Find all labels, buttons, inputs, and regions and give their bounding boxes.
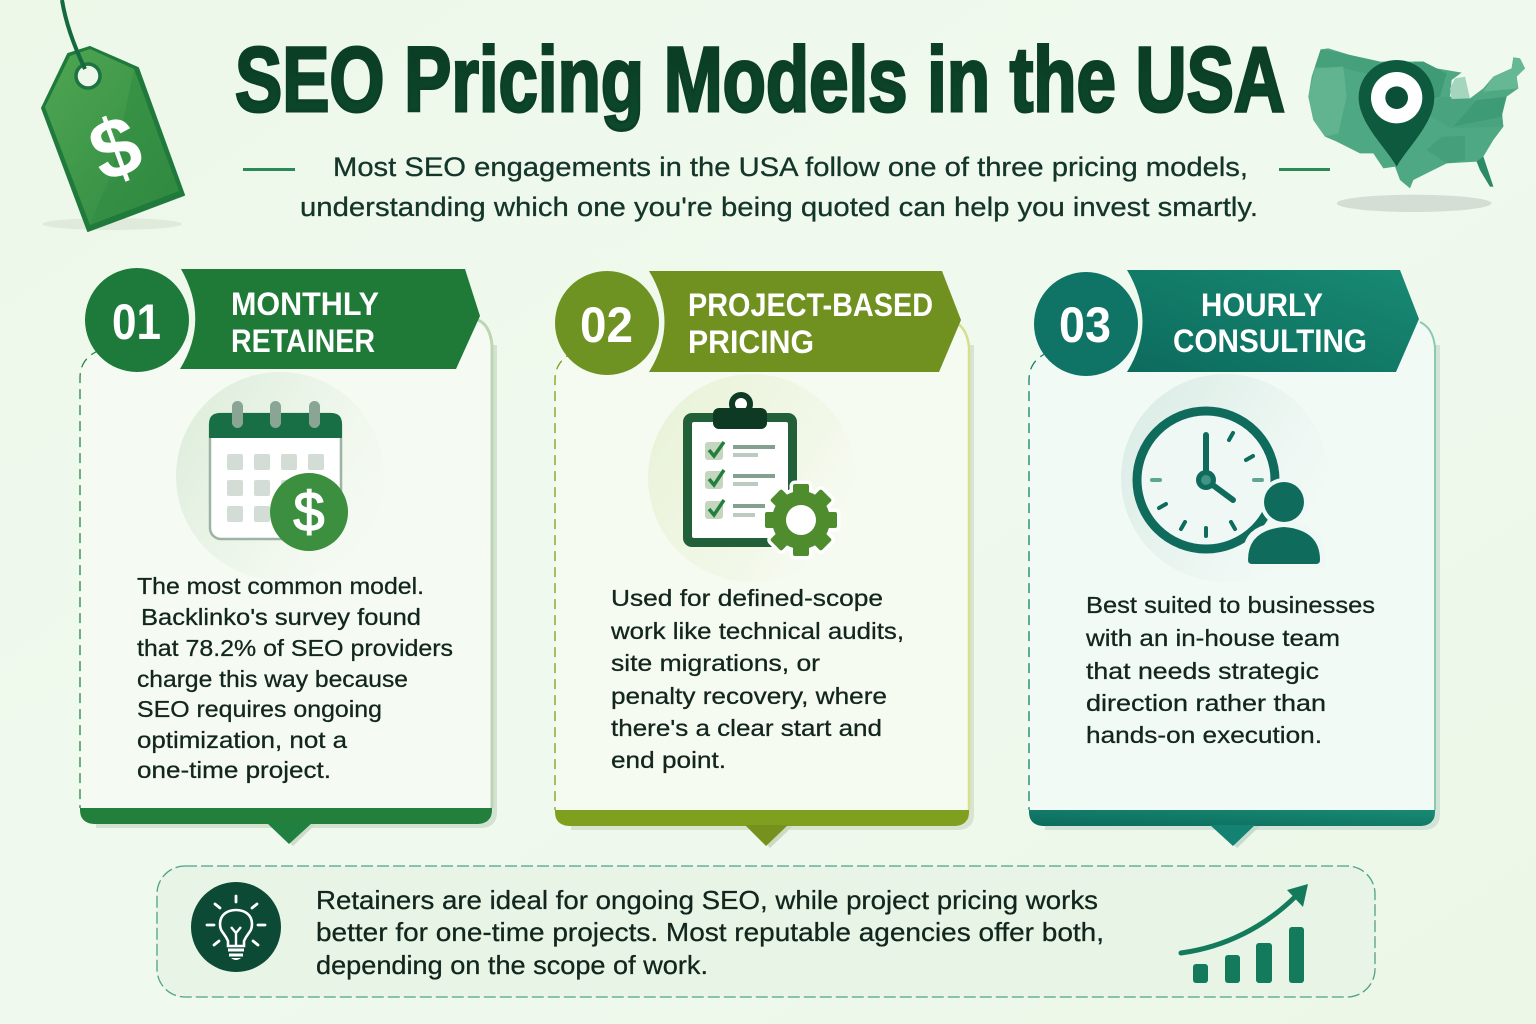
card 3 body text: with an in-house team xyxy=(1085,625,1340,651)
card 1 pointer xyxy=(267,823,316,846)
card 2 body text: end point. xyxy=(611,747,726,773)
icon: price tag xyxy=(42,0,184,231)
subtitle: understanding which one you're being quoted can help you invest smartly. xyxy=(300,192,1258,222)
card 2 heading banner: PRICING xyxy=(688,324,814,360)
icon: USA map with location pin xyxy=(1308,48,1525,212)
card 1 body text xyxy=(137,573,453,783)
card 3 heading banner: CONSULTING xyxy=(1173,323,1367,359)
card 1 heading banner: RETAINER xyxy=(231,323,375,359)
callout text: better for one-time projects. Most reputable agencies offer both, xyxy=(316,917,1104,947)
card 1 body text: The most common model. xyxy=(137,573,424,599)
card 1 body text: Backlinko's survey found xyxy=(141,604,421,630)
callout text xyxy=(316,885,1104,980)
callout text: Retainers are ideal for ongoing SEO, while project pricing works xyxy=(316,885,1098,915)
card 3 bottom band xyxy=(1029,810,1435,826)
card 3 heading banner: HOURLY xyxy=(1201,287,1323,323)
card 1 heading banner xyxy=(180,269,480,369)
card 1 number badge xyxy=(85,268,189,372)
card 1 body text: one-time project. xyxy=(137,757,331,783)
subtitle: Most SEO engagements in the USA follow one of three pricing models, xyxy=(333,152,1248,182)
card 2 body text: there's a clear start and xyxy=(611,715,882,741)
panel: project-based pricing xyxy=(555,271,974,848)
card 3 heading banner xyxy=(1127,270,1419,372)
card 2 pointer xyxy=(745,825,793,848)
card 2 body text: penalty recovery, where xyxy=(611,683,887,709)
card 1 body text: charge this way because xyxy=(137,666,408,692)
card 2 number badge: 02 xyxy=(580,297,633,353)
panel: hourly consulting xyxy=(1029,270,1440,848)
subtitle xyxy=(243,152,1330,222)
icon: growth chart with arrow xyxy=(1181,884,1308,983)
icon: calendar with dollar: $ xyxy=(293,480,325,543)
card 1 number badge: 01 xyxy=(112,294,161,350)
card 2 body text xyxy=(610,585,904,773)
card 1 bottom band xyxy=(80,808,492,824)
card 1 body text: that 78.2% of SEO providers xyxy=(137,635,453,661)
card 2 heading banner: PROJECT-BASED xyxy=(688,287,933,323)
card 1 heading banner: MONTHLY xyxy=(231,286,379,322)
card 3 body text: direction rather than xyxy=(1086,690,1326,716)
panel: monthly retainer xyxy=(80,268,497,846)
icon: clock with person xyxy=(1121,374,1329,582)
card 3 body text xyxy=(1085,592,1375,748)
callout text: depending on the scope of work. xyxy=(316,950,708,980)
card 3 number badge: 03 xyxy=(1059,297,1111,353)
icon: price tag: $ xyxy=(77,96,153,200)
callout: summary note xyxy=(157,866,1375,997)
card 2 body text: work like technical audits, xyxy=(610,618,904,644)
icon: calendar with dollar xyxy=(176,372,384,580)
card 3 body text: Best suited to businesses xyxy=(1086,592,1375,618)
icon: clipboard with gear xyxy=(648,374,856,582)
card 2 number badge xyxy=(555,271,659,375)
card 2 body text: Used for defined-scope xyxy=(611,585,883,611)
card 2 bottom band xyxy=(555,810,969,826)
icon: light bulb xyxy=(191,882,281,972)
card 2 body text: site migrations, or xyxy=(611,650,820,676)
card 2 heading banner xyxy=(649,271,961,372)
card 3 pointer xyxy=(1210,825,1260,848)
card 1 body text: SEO requires ongoing xyxy=(137,696,382,722)
card 3 body text: hands-on execution. xyxy=(1086,722,1322,748)
card 1 body text: optimization, not a xyxy=(137,727,348,753)
card 3 number badge xyxy=(1034,272,1138,376)
card 3 body text: that needs strategic xyxy=(1086,658,1319,684)
